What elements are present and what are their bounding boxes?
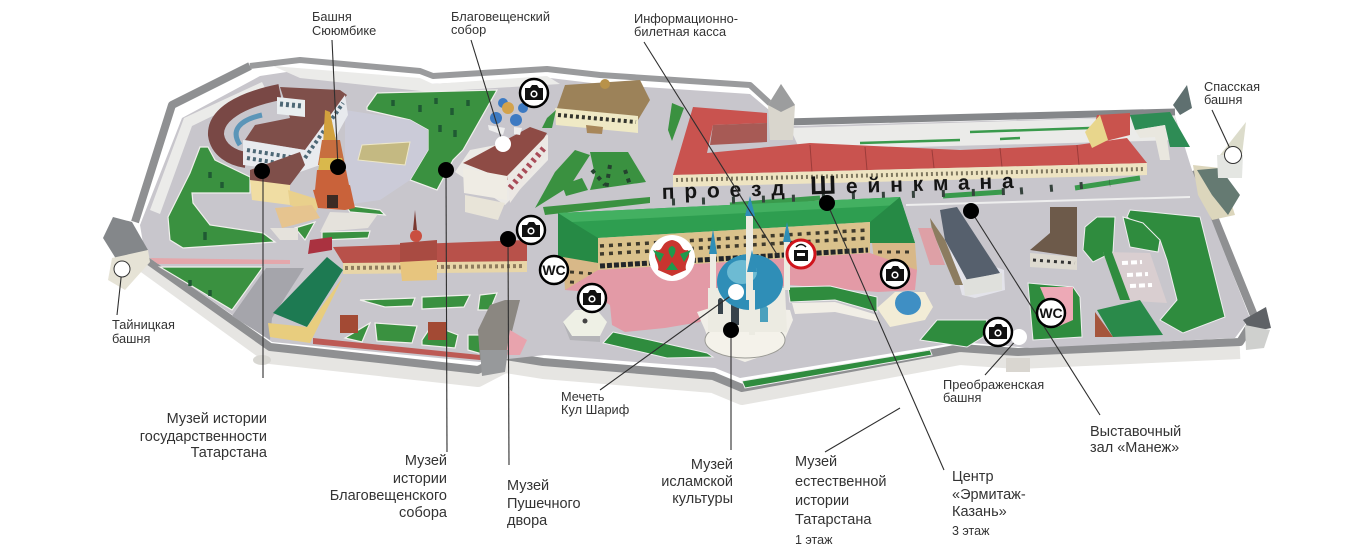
panel: green building wing bbox=[558, 197, 917, 290]
curved lawns bbox=[603, 286, 932, 388]
leader lines bbox=[117, 40, 1233, 470]
panel: red-roof north range bbox=[673, 84, 1147, 187]
palace facades bbox=[243, 95, 348, 172]
label: ticket office: Информационно- bbox=[634, 11, 738, 26]
panel: east gardens bbox=[920, 207, 1225, 347]
lawns bbox=[160, 90, 497, 354]
north white strips bbox=[150, 66, 1180, 214]
panel: brown administrative building bbox=[555, 79, 650, 134]
label: Hermitage-Kazan: «Эрмитаж- bbox=[952, 487, 1026, 503]
icon: info and ticket office bbox=[787, 240, 815, 268]
checkered gate bbox=[308, 237, 332, 254]
lawn trees bbox=[190, 98, 468, 296]
square garden bbox=[358, 142, 410, 165]
camera icons bbox=[517, 79, 1012, 346]
Spasskaya tower bbox=[1193, 122, 1246, 220]
base bbox=[697, 305, 793, 362]
SE corner tower bbox=[1243, 307, 1271, 350]
label: Annunciation cathedral: Благовещенский bbox=[451, 9, 550, 24]
label: Manege hall: Выставочный bbox=[1090, 424, 1181, 440]
Syuyumbike tower bbox=[313, 110, 355, 210]
label: Preobrazhenskaya tower: Преображенская bbox=[943, 377, 1044, 392]
panel: central gardens bbox=[535, 103, 684, 215]
label: Spasskaya tower: Спасская bbox=[1204, 79, 1260, 94]
label: Spasskaya tower: башня bbox=[1204, 92, 1242, 107]
long red building bbox=[333, 210, 527, 281]
pink plaza bbox=[565, 253, 917, 332]
cannon yard tower bbox=[478, 300, 520, 360]
label: Annunciation museum: собора bbox=[399, 505, 448, 521]
Taynitskaya tower bbox=[103, 217, 150, 290]
panel: Annunciation cathedral bbox=[455, 98, 548, 220]
white tower markers bbox=[114, 136, 1242, 345]
panel: east towers bbox=[1006, 85, 1271, 372]
north strip hedges bbox=[860, 128, 1090, 143]
label: natural history museum: истории bbox=[795, 493, 849, 509]
street name label: проезд Ш ейнкмана bbox=[661, 164, 1014, 205]
label: Kul Sharif mosque: Мечеть bbox=[561, 389, 604, 404]
Preobrazhenskaya gate bbox=[1006, 358, 1030, 372]
south-west bastion base bbox=[253, 355, 271, 365]
panel: north-east building bbox=[1085, 112, 1190, 160]
panel: octagon pavilions bbox=[563, 291, 933, 342]
road hedges bbox=[672, 178, 1190, 205]
label: museum of statehood: государственности bbox=[140, 429, 267, 445]
panel: Manege bbox=[918, 207, 1005, 298]
curved palace roof bbox=[216, 92, 280, 160]
label: natural history museum: Музей bbox=[795, 454, 837, 470]
brown building bbox=[1030, 207, 1077, 257]
label: Annunciation museum: Музей bbox=[405, 453, 447, 469]
label: natural history museum: Татарстана bbox=[795, 512, 872, 528]
label: Annunciation museum: Благовещенского bbox=[330, 488, 447, 504]
brick pavilions bbox=[340, 315, 447, 340]
label: Cannon yard museum: двора bbox=[507, 513, 548, 529]
label: museum of statehood: Музей истории bbox=[167, 411, 267, 427]
black museum markers bbox=[254, 159, 979, 338]
icon: WC right bbox=[1037, 299, 1065, 327]
red brick strip bbox=[313, 338, 480, 360]
label: Hermitage-Kazan: Казань» bbox=[952, 504, 1007, 520]
icon: WC left bbox=[540, 256, 568, 284]
minarets bbox=[710, 214, 790, 335]
dome bbox=[717, 254, 783, 310]
palace roofs bbox=[245, 87, 347, 150]
arcade walkway bbox=[792, 302, 880, 322]
green roof building bbox=[1097, 300, 1163, 337]
label: Islamic culture museum: культуры bbox=[672, 491, 733, 507]
label: Cannon yard museum: Пушечного bbox=[507, 496, 581, 512]
label: Taynitskaya tower: Тайницкая bbox=[112, 317, 175, 332]
plaza bbox=[345, 110, 428, 205]
round north tower bbox=[768, 84, 795, 140]
label: Taynitskaya tower: башня bbox=[112, 331, 150, 346]
label: Syuyumbike tower: Сююмбике bbox=[312, 23, 376, 38]
label: Preobrazhenskaya tower: башня bbox=[943, 390, 981, 405]
main body bbox=[708, 288, 787, 332]
NE corner tower bbox=[1173, 85, 1192, 115]
panel: Kul Sharif mosque bbox=[697, 196, 793, 362]
yellow museum bbox=[250, 180, 290, 205]
label: Islamic culture museum: Музей bbox=[691, 457, 733, 473]
domes bbox=[490, 98, 528, 126]
panel: western citadel bbox=[103, 87, 527, 376]
label: Syuyumbike tower: Башня bbox=[312, 9, 352, 24]
icon: WC left: WC bbox=[542, 262, 566, 278]
label: ticket office: билетная касса bbox=[634, 24, 727, 39]
icon: WC right: WC bbox=[1039, 305, 1063, 321]
kremlin walls bbox=[135, 60, 1255, 398]
label: natural history museum: естественной bbox=[795, 474, 887, 490]
label: Islamic culture museum: исламской bbox=[661, 474, 733, 490]
label: Manege hall: зал «Манеж» bbox=[1090, 440, 1179, 456]
label: Annunciation museum: истории bbox=[393, 471, 447, 487]
green roof building bbox=[268, 257, 343, 343]
label: Kul Sharif mosque: Кул Шариф bbox=[561, 402, 629, 417]
label: Cannon yard museum: Музей bbox=[507, 478, 549, 494]
road and pink strip bbox=[150, 258, 290, 264]
label: Hermitage-Kazan: Центр bbox=[952, 469, 994, 485]
white court building bbox=[1103, 252, 1167, 303]
ground pavement bbox=[140, 70, 1250, 378]
label: Hermitage-Kazan: 3 этаж bbox=[952, 524, 990, 538]
icon: kremlin logo bbox=[649, 235, 695, 281]
label: museum of statehood: Татарстана bbox=[191, 445, 268, 461]
label: Annunciation cathedral: собор bbox=[451, 22, 486, 37]
